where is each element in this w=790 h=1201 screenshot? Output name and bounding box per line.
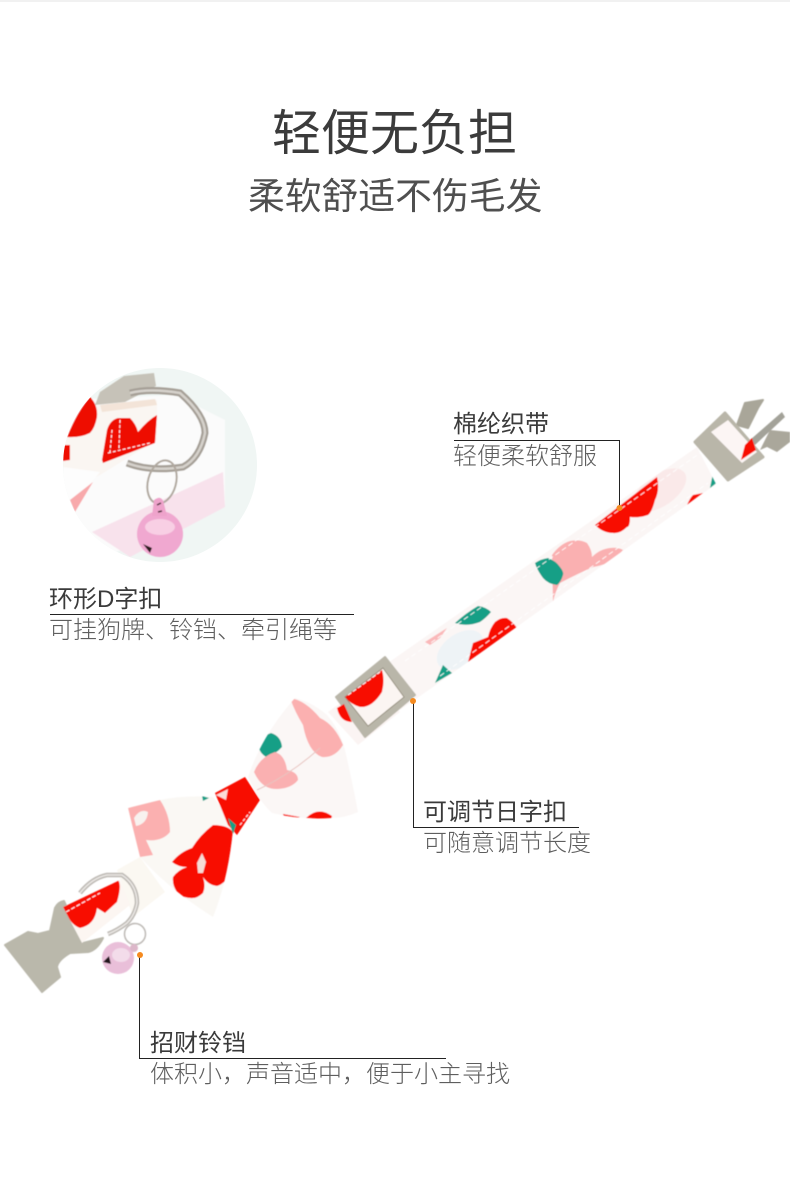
callout line: 招财铃铛 [137,952,446,1058]
ribbon over D-ring [63,880,130,943]
buckle: right clip, slide and prongs [695,400,790,480]
label text: 体积小: 体积小，声音适中，便于小主寻找 [150,1061,510,1088]
callout line: 棉纶织带 [454,440,622,511]
label heading: 招财铃铛: 招财铃铛 [150,1030,246,1057]
strap: long section [385,447,723,710]
buckle: plastic side-release clip [5,901,103,992]
bow left lobe [128,796,234,917]
slide buckle [336,657,415,737]
label heading: 可调节日字扣: 可调节日字扣 [423,799,567,826]
strap: left section [117,857,165,917]
bell [102,942,138,974]
collar [5,400,790,992]
D-ring [80,875,137,934]
callout line: 环形D字扣 [50,614,354,616]
label heading: 棉纶织带: 棉纶织带 [453,411,549,438]
inset photo: D-ring and bell [63,368,257,575]
label heading: 环形D字扣: 环形D字扣 [49,586,162,613]
top edge shading [0,0,790,2]
bow knot [215,777,260,835]
label text: 可挂狗牌: 可挂狗牌、铃铛、牵引绳等 [49,617,337,644]
strap: short section behind slide buckle [328,680,400,745]
bell ring [124,924,146,944]
label text: 轻便柔软舒服: 轻便柔软舒服 [453,443,597,470]
title: 轻便无负担 [272,107,517,161]
bow right lobe [248,698,358,820]
callout line: 可调节日字扣 [410,698,579,828]
subtitle: 柔软舒适不伤毛发 [248,176,542,217]
label text: 可随意调节长度: 可随意调节长度 [423,830,591,857]
